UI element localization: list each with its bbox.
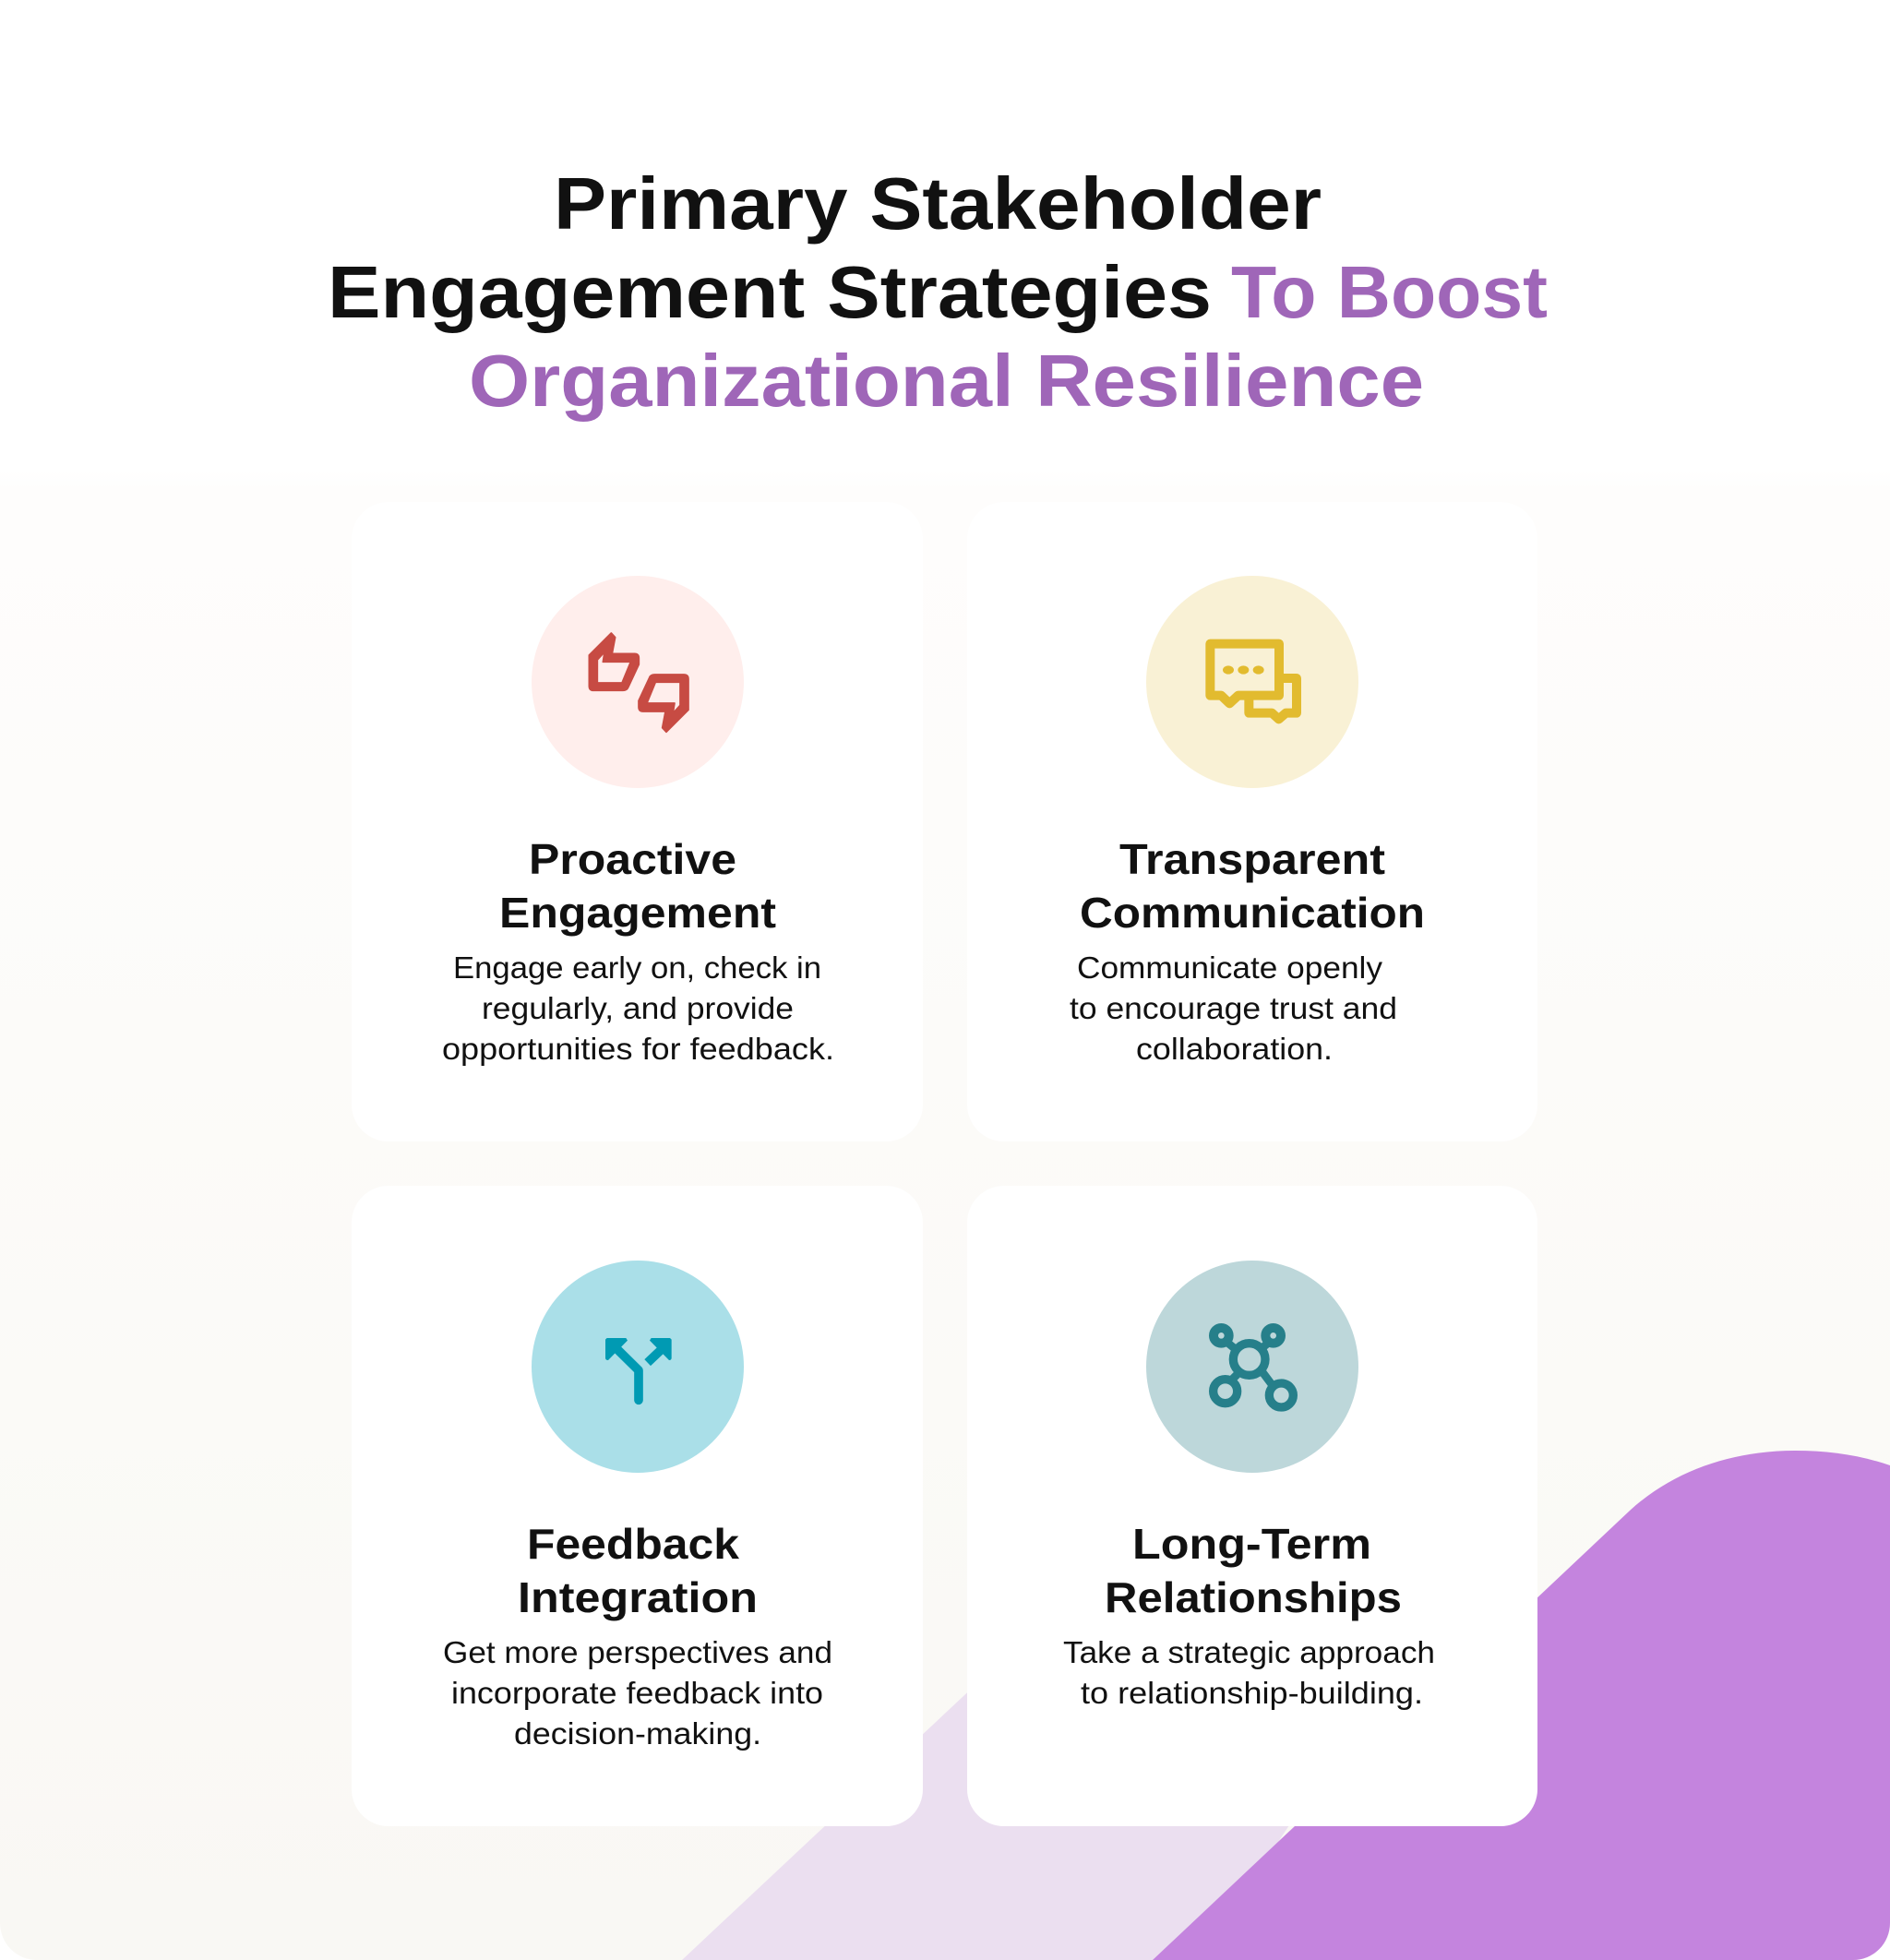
title: Primary Stakeholder bbox=[554, 162, 1322, 245]
text: feedback integration description: incorporate feedback into bbox=[451, 1676, 823, 1710]
text: feedback integration description bbox=[443, 1635, 832, 1751]
text: proactive engagement description: Engage early on, check in bbox=[453, 950, 821, 985]
text: proactive engagement description bbox=[442, 950, 834, 1066]
icon: chat bubbles bbox=[1146, 576, 1358, 788]
panel: feedback integration bbox=[352, 1186, 923, 1826]
heading: feedback integration: Integration bbox=[518, 1573, 758, 1621]
heading: long-term relationships: Long-Term bbox=[1132, 1520, 1371, 1568]
title: To Boost bbox=[1231, 251, 1548, 333]
title: Engagement Strategies bbox=[328, 251, 1212, 333]
heading: long-term relationships bbox=[1105, 1520, 1402, 1621]
text: transparent communication description: collaboration. bbox=[1136, 1032, 1333, 1066]
heading: feedback integration bbox=[518, 1520, 758, 1621]
text: transparent communication description bbox=[1070, 950, 1397, 1066]
text: transparent communication description: to encourage trust and bbox=[1070, 991, 1397, 1025]
heading: transparent communication bbox=[1080, 835, 1425, 937]
panel: long-term relationships bbox=[967, 1186, 1537, 1826]
text: transparent communication description: Communicate openly bbox=[1077, 950, 1383, 985]
title bbox=[328, 162, 1548, 422]
text: feedback integration description: decision-making. bbox=[514, 1716, 761, 1751]
icon: network nodes bbox=[1146, 1261, 1358, 1473]
text: long-term relationships description: to relationship-building. bbox=[1081, 1676, 1423, 1710]
text: long-term relationships description bbox=[1063, 1635, 1435, 1710]
heading: transparent communication: Communication bbox=[1080, 889, 1425, 937]
heading: proactive engagement: Proactive bbox=[529, 835, 736, 883]
heading: transparent communication: Transparent bbox=[1119, 835, 1385, 883]
icon: thumbs up and down bbox=[532, 576, 744, 788]
decorative purple shape bbox=[1153, 1451, 1890, 1960]
panel: proactive engagement bbox=[352, 502, 923, 1141]
heading: long-term relationships: Relationships bbox=[1105, 1573, 1402, 1621]
text: proactive engagement description: opportunities for feedback. bbox=[442, 1032, 834, 1066]
text: long-term relationships description: Take a strategic approach bbox=[1063, 1635, 1435, 1669]
icon: splitting arrows bbox=[532, 1261, 744, 1473]
heading: feedback integration: Feedback bbox=[527, 1520, 739, 1568]
text: feedback integration description: Get more perspectives and bbox=[443, 1635, 832, 1669]
heading: proactive engagement bbox=[499, 835, 776, 937]
heading: proactive engagement: Engagement bbox=[499, 889, 776, 937]
title: Organizational Resilience bbox=[469, 340, 1424, 422]
decorative light purple shape bbox=[682, 1682, 1384, 1960]
text: proactive engagement description: regularly, and provide bbox=[482, 991, 794, 1025]
panel: transparent communication bbox=[967, 502, 1537, 1141]
